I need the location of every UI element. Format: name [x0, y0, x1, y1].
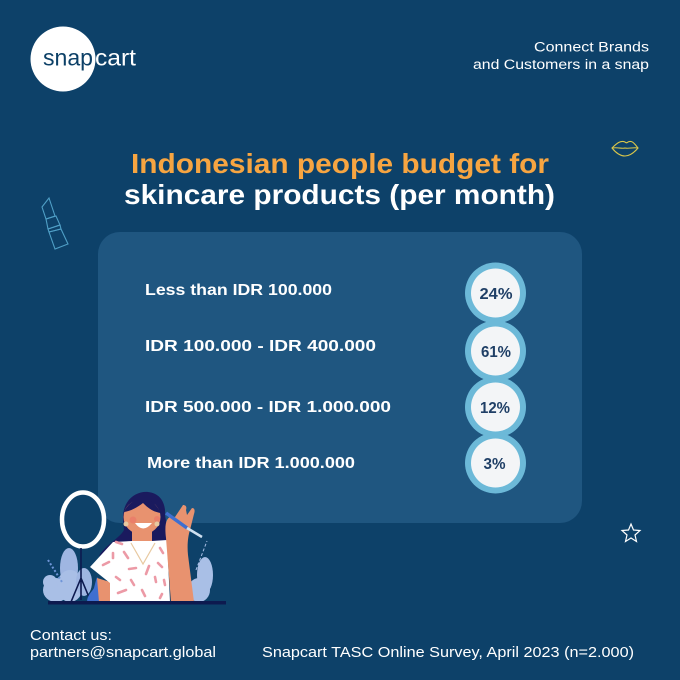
contact — [30, 628, 216, 661]
cheeks — [130, 516, 136, 524]
smile — [135, 523, 152, 528]
arm and hand — [165, 505, 195, 602]
neck and face — [132, 528, 152, 546]
contact: partners@snapcart.global — [30, 645, 216, 661]
source: Snapcart TASC Online Survey, April 2023 (n=2.000) — [262, 645, 634, 661]
percentage badges — [465, 262, 526, 494]
tripod — [71, 548, 91, 602]
percentage badges: 24% — [480, 286, 512, 303]
title: skincare products (per month) — [124, 179, 555, 210]
sparkle — [196, 541, 207, 570]
plants — [43, 548, 213, 602]
percentage badges: 61% — [481, 344, 511, 361]
icon: lips — [612, 141, 638, 156]
left arm — [97, 578, 112, 602]
row labels: More than IDR 1.000.000 — [147, 455, 355, 472]
panel: budget ranges — [98, 232, 582, 523]
percentage badges: 3% — [484, 456, 506, 473]
ring light — [62, 492, 104, 546]
icon: star — [622, 524, 640, 542]
logo: snapcart: snap — [43, 44, 93, 70]
icon: lipstick — [42, 198, 68, 249]
row labels: Less than IDR 100.000 — [145, 282, 332, 299]
shirt pattern — [103, 542, 165, 598]
contact: Contact us: — [30, 628, 112, 644]
percentage badges: 12% — [480, 400, 510, 417]
blue leaf — [87, 577, 105, 602]
small sprig — [48, 560, 62, 582]
hair — [99, 492, 167, 556]
logo: snapcart — [30, 26, 137, 92]
row labels: IDR 500.000 - IDR 1.000.000 — [145, 399, 391, 416]
necklace — [131, 543, 155, 564]
tagline: Connect Brands — [534, 40, 649, 54]
tagline — [473, 40, 649, 72]
logo: snapcart: cart — [95, 44, 137, 70]
illustration: woman with ring light — [43, 492, 226, 604]
title — [124, 148, 555, 210]
shirt — [90, 540, 170, 602]
serum pen — [166, 513, 187, 528]
tagline: and Customers in a snap — [473, 57, 649, 72]
title: Indonesian people budget for — [131, 148, 549, 179]
table line — [48, 601, 226, 604]
row labels: IDR 100.000 - IDR 400.000 — [145, 338, 376, 355]
row labels — [145, 282, 391, 472]
